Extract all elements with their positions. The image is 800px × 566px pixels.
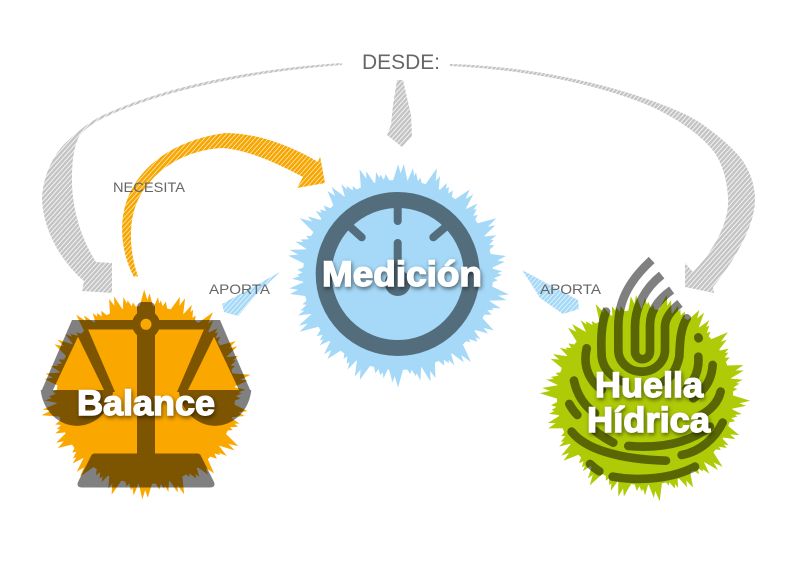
arrow: grey right, from DESDE to Huella Hídrica: [450, 64, 755, 293]
arrow: blue, from Medición to Balance: [222, 272, 280, 316]
title: Huella Hídrica: [587, 366, 711, 440]
title: Balance: Balance: [77, 384, 215, 423]
arrow: blue, from Medición to Huella Hídrica: [522, 270, 579, 314]
icon: scales: [41, 302, 251, 488]
panel: Balance: [0, 220, 322, 566]
green burst: [452, 203, 800, 566]
label: NECESITA: NECESITA: [113, 179, 186, 195]
orange burst: [0, 220, 322, 566]
title: Huella Hídrica: Hídrica: [587, 401, 711, 440]
icon: gauge: [324, 200, 472, 348]
arrow: grey left, from DESDE to Balance: [42, 63, 342, 293]
label: APORTA left: APORTA: [209, 281, 271, 297]
icon: scale pivot: [140, 319, 152, 330]
arrow: grey centre, from DESDE to Medición: [387, 80, 412, 147]
heading: DESDE: DESDE:: [362, 51, 440, 74]
title: Huella Hídrica: Huella: [595, 366, 704, 405]
title: Medición: Medición: [322, 255, 482, 294]
icon: fingerprint: [569, 260, 723, 479]
arrow: orange, from Balance to Medición: [122, 133, 325, 277]
label: APORTA right: APORTA: [540, 281, 602, 297]
blue burst: [223, 99, 574, 449]
panel: Medición: [223, 99, 574, 449]
panel: Huella Hídrica: [452, 203, 800, 566]
